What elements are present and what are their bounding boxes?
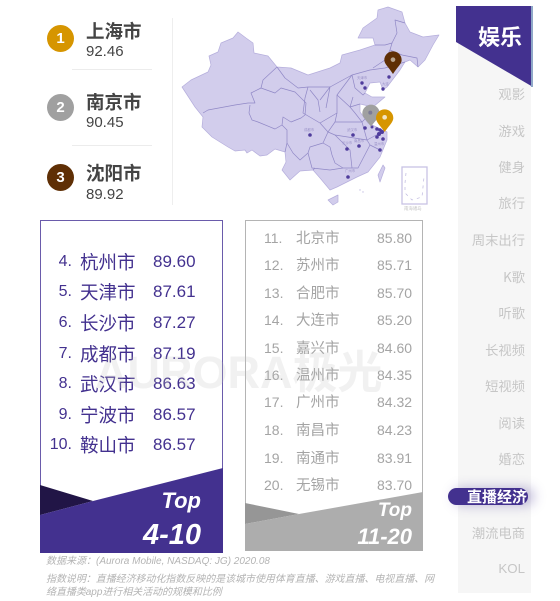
inset: South China Sea: 南海诸岛	[404, 205, 422, 212]
row 10: 10.	[50, 436, 72, 453]
map labels: 广州市	[345, 168, 356, 173]
rank 2 city name: 南京市	[86, 89, 142, 115]
row 6: 6.	[59, 314, 72, 331]
row 13	[264, 282, 412, 303]
panel: top three cities	[47, 18, 173, 205]
rank 1 badge	[47, 25, 74, 52]
row 7: 成都市	[80, 341, 136, 367]
row 19: 南通市	[296, 447, 340, 468]
row 8: 武汉市	[80, 371, 136, 397]
menu: 长视频: 长视频	[485, 340, 525, 359]
map land outline	[182, 7, 439, 205]
row 4: 4.	[59, 253, 72, 270]
city dots	[308, 75, 391, 179]
map of China	[182, 6, 440, 212]
row 13: 13.	[264, 285, 283, 301]
row 13: 85.70	[377, 285, 412, 301]
menu: 听歌: 听歌	[498, 303, 525, 322]
banner: top 4-10	[40, 468, 223, 553]
row 7: 7.	[59, 345, 72, 362]
row 17: 17.	[264, 394, 283, 410]
sidebar header tab	[456, 6, 533, 87]
row 10: 86.57	[153, 435, 196, 454]
row 16: 16.	[264, 367, 283, 383]
menu: 观影: 观影	[498, 84, 525, 103]
map labels: 大连	[382, 81, 389, 86]
row 9: 86.57	[153, 405, 196, 424]
pin: Nanjing	[362, 105, 380, 127]
banner: top 11-20: 11-20	[357, 524, 413, 549]
row 15	[264, 337, 412, 358]
row 10	[50, 432, 196, 458]
row 18: 84.23	[377, 422, 412, 438]
rank 1 score: 92.46	[86, 43, 124, 60]
map labels	[304, 75, 389, 173]
active menu pill: 直播经济: 直播经济	[467, 486, 527, 507]
row 4: 89.60	[153, 252, 196, 271]
row 4: 杭州市	[80, 249, 136, 275]
map labels: 长沙市	[342, 140, 353, 145]
row 18: 18.	[264, 422, 283, 438]
source note: 数据来源：(Aurora Mobile, NASDAQ: JG) 2020.08	[46, 556, 270, 567]
menu: 周末出行: 周末出行	[472, 230, 525, 249]
sidebar title: 娱乐	[478, 20, 522, 52]
row 16: 温州市	[296, 364, 340, 385]
menu: 阅读: 阅读	[498, 413, 525, 432]
menu: 健身: 健身	[498, 157, 525, 176]
banner: top 11-20: Top	[378, 500, 412, 521]
banner: top 4-10: Top	[162, 488, 201, 513]
row 8	[59, 371, 196, 397]
map labels: 天津市	[357, 75, 368, 80]
pin: Shenyang	[384, 51, 402, 74]
map labels: 成都市	[304, 127, 315, 132]
row 8: 8.	[59, 375, 72, 392]
row 9: 宁波市	[80, 402, 136, 428]
row 18: 南昌市	[296, 419, 340, 440]
row 14: 大连市	[296, 309, 340, 330]
row 19: 83.91	[377, 450, 412, 466]
menu: 潮流电商: 潮流电商	[472, 523, 525, 542]
banner: top 11-20	[245, 492, 422, 551]
row 12	[264, 254, 412, 275]
map labels: 武汉市	[347, 127, 358, 132]
row 6: 长沙市	[80, 310, 136, 336]
rank 3 badge: 3	[56, 169, 65, 186]
index description note: 指数说明：直播经济移动化指数反映的是该城市使用体育直播、游戏直播、电视直播、网络直播类app进行相关活动的规模和比例	[46, 574, 434, 598]
row 17	[264, 391, 412, 412]
menu: 游戏: 游戏	[498, 121, 525, 140]
row 8: 86.63	[153, 374, 196, 393]
rank 1 badge: 1	[56, 30, 65, 47]
row 14: 14.	[264, 312, 283, 328]
row 7: 87.19	[153, 344, 196, 363]
row 5: 天津市	[80, 279, 136, 305]
row 12: 苏州市	[296, 254, 340, 275]
row 20	[264, 474, 412, 495]
row 18	[264, 419, 412, 440]
inset: South China Sea	[402, 167, 427, 212]
row 11	[264, 227, 412, 248]
rank 1 city name: 上海市	[86, 18, 142, 44]
map labels: 南昌市	[354, 138, 365, 143]
row 11: 85.80	[377, 230, 412, 246]
row 14: 85.20	[377, 312, 412, 328]
menu: 短视频: 短视频	[485, 376, 525, 395]
province boundaries	[203, 20, 418, 170]
row 6	[59, 310, 196, 336]
rank 3 badge	[47, 164, 74, 191]
row 4	[59, 249, 196, 275]
row 11: 11.	[264, 230, 282, 246]
menu: KOL: KOL	[498, 561, 525, 576]
row 5: 5.	[59, 283, 72, 300]
row 16: 84.35	[377, 367, 412, 383]
row 7	[59, 341, 196, 367]
row 5	[59, 279, 196, 305]
pin: Shanghai	[376, 109, 393, 132]
menu: 婚恋: 婚恋	[498, 449, 525, 468]
active menu pill: 直播经济	[448, 488, 528, 505]
row 13: 合肥市	[296, 282, 340, 303]
row 12: 85.71	[377, 257, 412, 273]
row 20: 83.70	[377, 477, 412, 493]
small islands	[359, 189, 364, 193]
row 6: 87.27	[153, 313, 196, 332]
rank 3 score: 89.92	[86, 186, 124, 203]
panel: top 11-20 list	[245, 220, 423, 551]
row 20: 20.	[264, 477, 283, 493]
menu: K歌: K歌	[503, 267, 525, 286]
rank 2 badge: 2	[56, 99, 65, 116]
row 9	[59, 402, 196, 428]
rank 2 score: 90.45	[86, 114, 124, 131]
row 16	[264, 364, 412, 385]
row 19: 19.	[264, 450, 283, 466]
row 9: 9.	[59, 406, 72, 423]
sidebar	[448, 6, 540, 593]
row 15: 84.60	[377, 340, 412, 356]
panel: top 4-10 list	[40, 220, 223, 553]
banner: top 4-10: 4-10	[142, 519, 201, 551]
row 20: 无锡市	[296, 474, 340, 495]
rank 2 badge	[47, 94, 74, 121]
watermark: AURORA极光	[95, 347, 382, 398]
row 19	[264, 447, 412, 468]
row 12: 12.	[264, 257, 283, 273]
row 14	[264, 309, 412, 330]
row 5: 87.61	[153, 282, 196, 301]
row 11: 北京市	[296, 227, 340, 248]
row 17: 广州市	[296, 391, 340, 412]
row 10: 鞍山市	[80, 432, 136, 458]
menu: 旅行: 旅行	[498, 193, 525, 212]
row 15: 嘉兴市	[296, 337, 340, 358]
rank 3 city name: 沈阳市	[86, 160, 142, 186]
map labels: 温州市	[374, 141, 385, 146]
row 17: 84.32	[377, 394, 412, 410]
row 15: 15.	[264, 340, 283, 356]
